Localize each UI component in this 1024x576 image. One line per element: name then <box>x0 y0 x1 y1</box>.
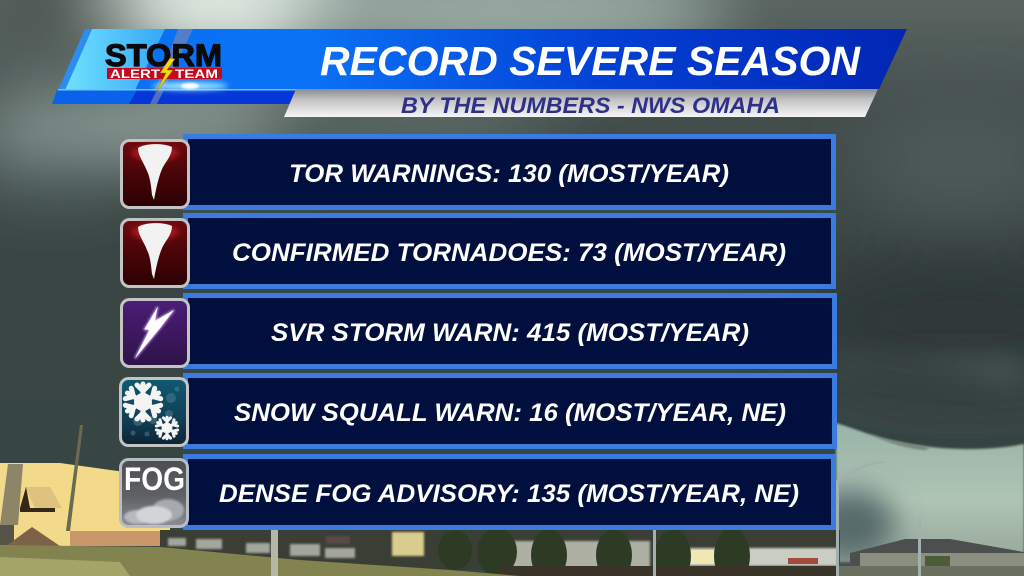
row text: DENSE FOG ADVISORY: 135 (MOST/YEAR, NE) <box>219 480 799 508</box>
subtitle: BY THE NUMBERS - NWS OMAHA <box>401 93 780 118</box>
panel <box>186 136 834 208</box>
row text: TOR WARNINGS: 130 (MOST/YEAR) <box>289 160 729 188</box>
panel <box>186 376 834 446</box>
icon: tornado <box>122 220 188 286</box>
cyan logo panel <box>65 29 165 90</box>
row text: CONFIRMED TORNADOES: 73 (MOST/YEAR) <box>232 239 786 267</box>
icon: fog: FOG <box>124 461 185 497</box>
icon: lightning bolt <box>155 58 175 94</box>
icon: lightning <box>122 300 188 366</box>
icon: snowflakes <box>120 378 188 446</box>
logo: Storm Alert Team: TEAM <box>175 67 218 81</box>
logo: Storm Alert Team: ALERT <box>110 67 161 81</box>
row 1: tornado warnings <box>122 136 834 208</box>
row 3: severe storm warnings <box>122 296 834 366</box>
gray subtitle bar <box>284 89 878 117</box>
title: RECORD SEVERE SEASON <box>320 38 861 84</box>
building at left <box>0 463 170 546</box>
treeline and car lot <box>160 530 840 570</box>
light poles <box>271 530 278 576</box>
icon: fog <box>120 460 188 526</box>
row 5: dense fog advisory <box>120 456 834 528</box>
lamp post left <box>66 425 83 531</box>
icon: tornado <box>122 140 188 208</box>
row 4: snow squall warnings <box>120 376 834 446</box>
panel <box>186 216 834 286</box>
logo: Storm Alert Team: STORM <box>105 37 222 73</box>
row text: SNOW SQUALL WARN: 16 (MOST/YEAR, NE) <box>234 399 786 427</box>
header banner <box>52 29 907 118</box>
logo: Storm Alert Team <box>105 37 222 94</box>
grass <box>0 545 520 576</box>
panel <box>186 456 834 528</box>
row 2: confirmed tornadoes <box>122 216 834 286</box>
lower right pale sky below the cloud base <box>836 423 1024 562</box>
houses at right <box>850 539 1024 576</box>
panel <box>186 296 834 366</box>
blue title bar <box>52 29 907 104</box>
row text: SVR STORM WARN: 415 (MOST/YEAR) <box>271 319 749 347</box>
